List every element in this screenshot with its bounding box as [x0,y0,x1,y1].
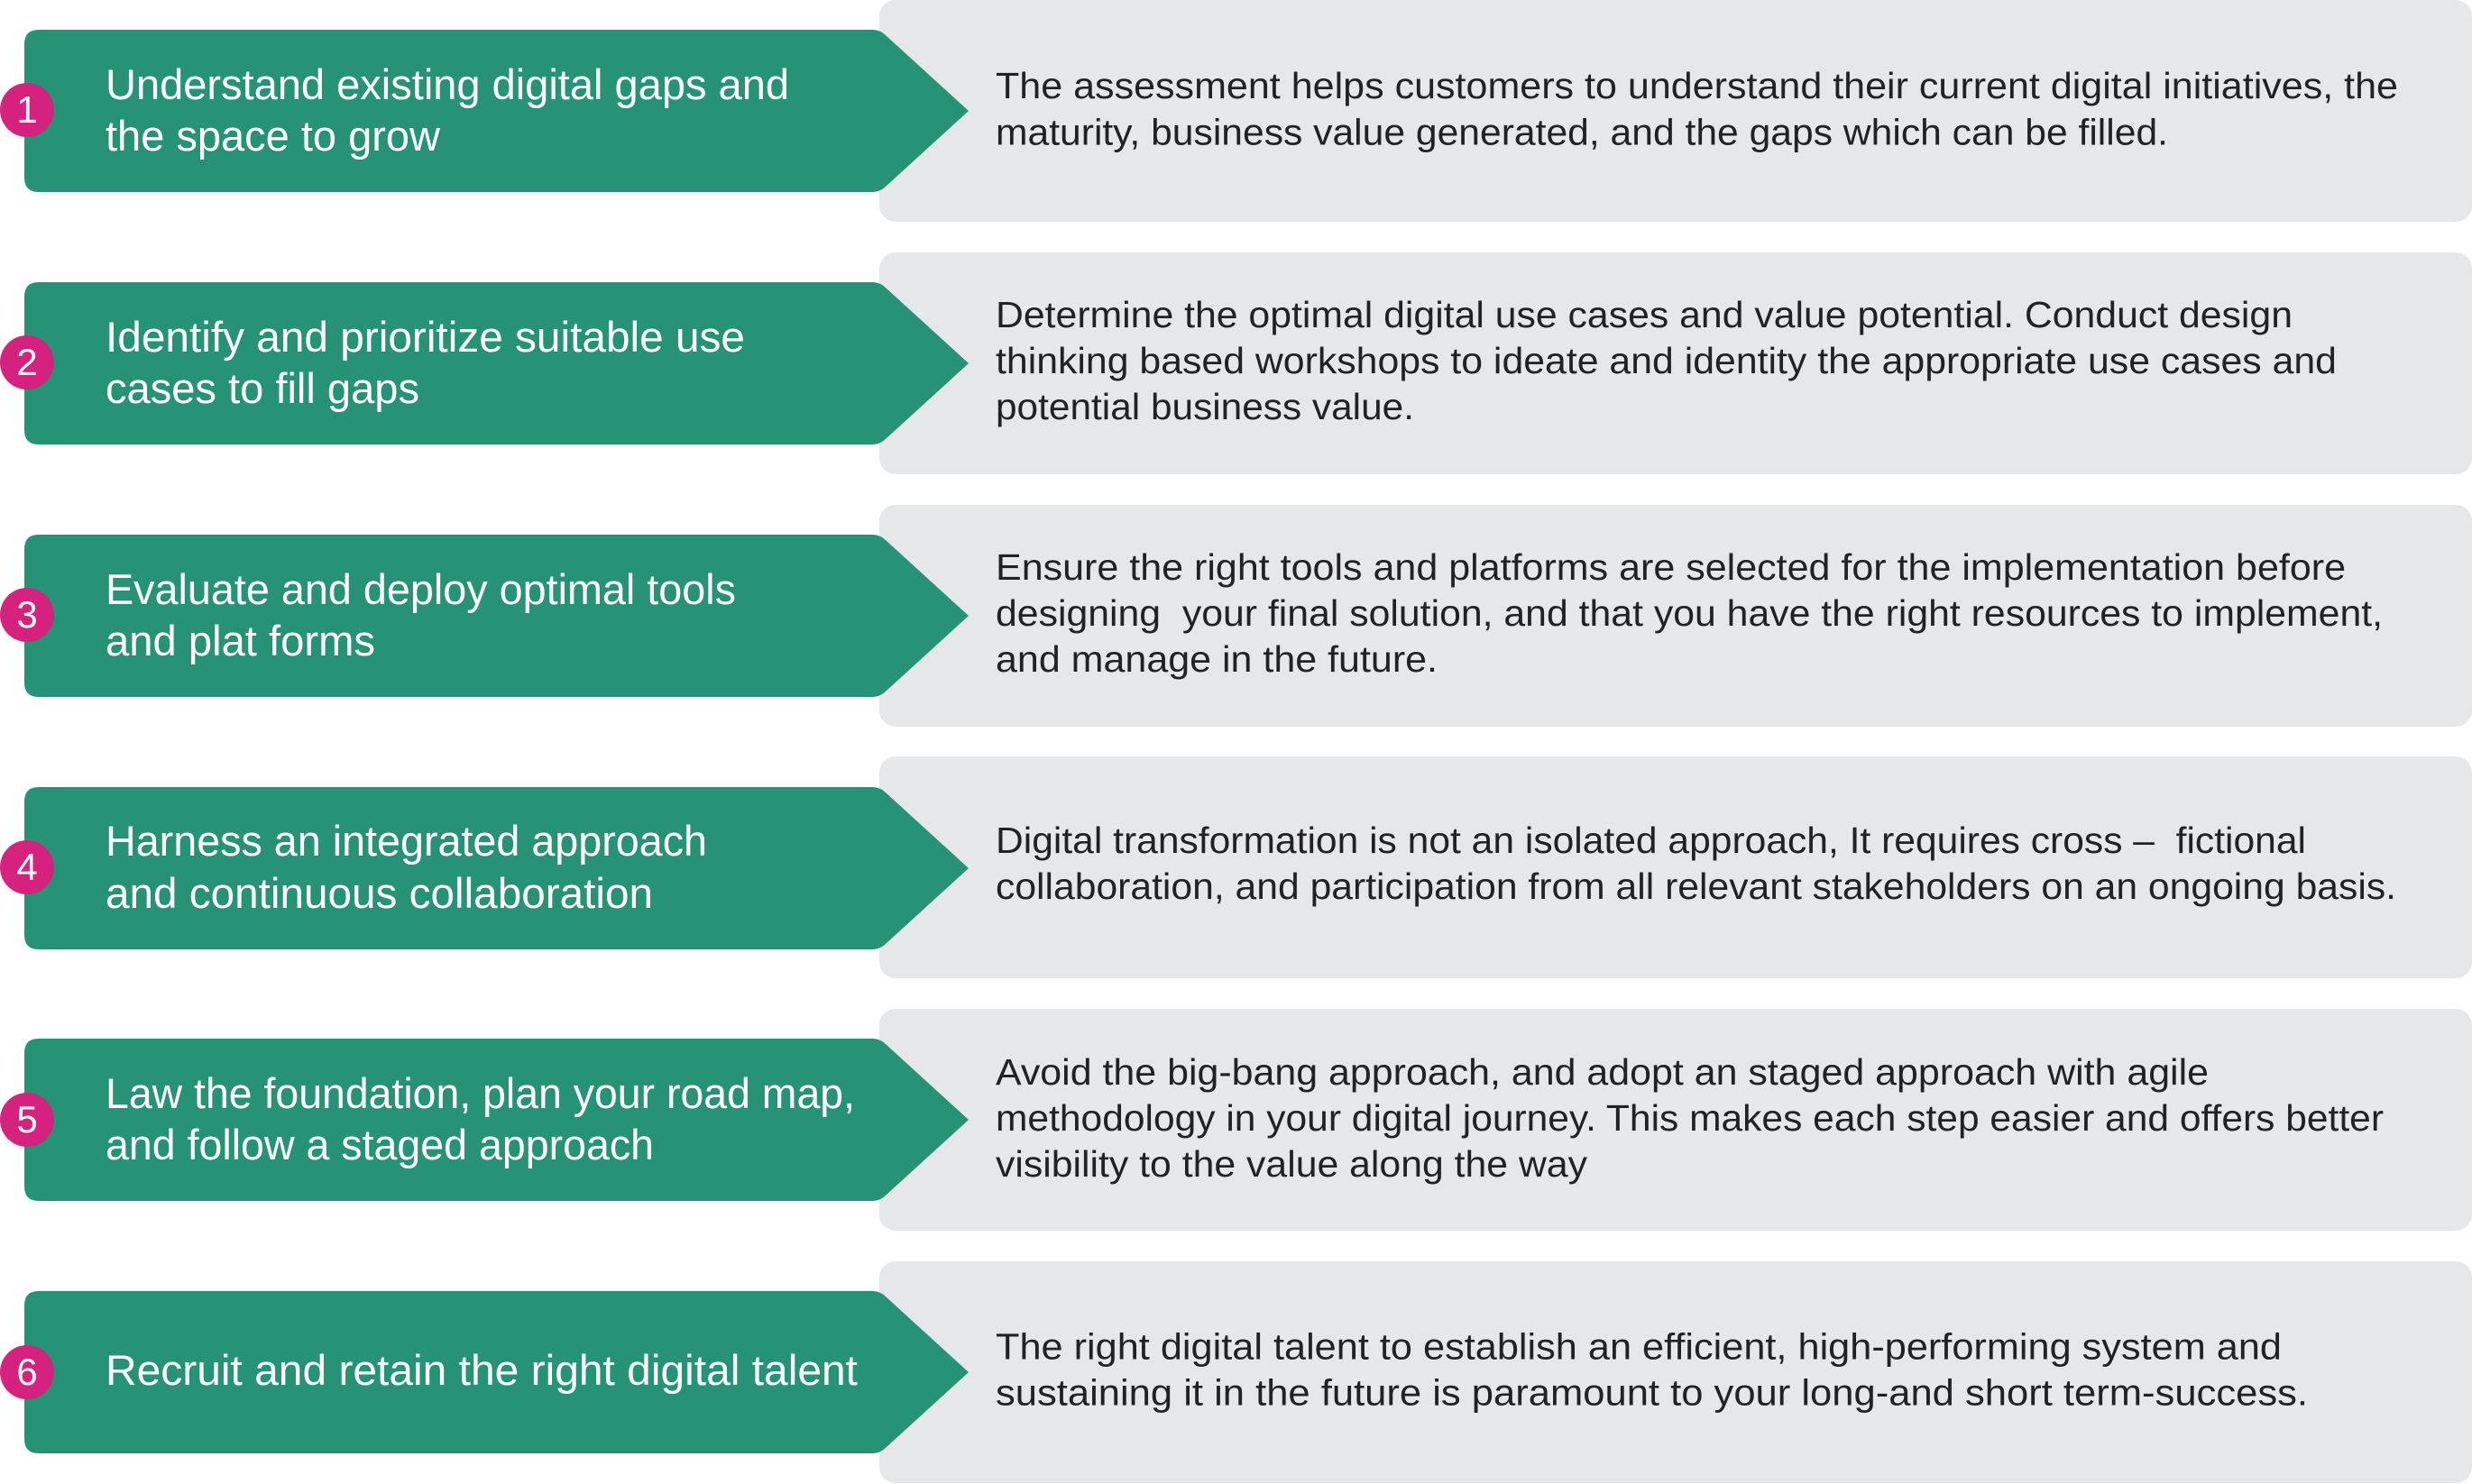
description panel 6 [879,1261,2472,1483]
step heading 3: and plat forms [106,617,375,664]
green arrow 3 [24,535,969,697]
green arrow 5 [24,1039,969,1201]
number badge 2: 2 [16,341,38,383]
description panel 4 [879,756,2472,978]
step description 3: designing your final solution, and that you have the right resources to implement, [996,592,2383,634]
row 6: talent [0,1261,2472,1483]
number badge 3 [0,588,54,642]
step description 5: visibility to the value along the way [996,1143,1588,1185]
number badge 6: 6 [16,1351,38,1393]
step description 3: and manage in the future. [996,638,1438,680]
step description 6: The right digital talent to establish an efficient, high-performing system and [996,1325,2282,1367]
number badge 1 [0,83,54,137]
step heading 1: the space to grow [106,112,441,160]
green arrow 6 [24,1291,969,1453]
step heading 5: and follow a staged approach [106,1121,654,1168]
step description 2: thinking based workshops to ideate and identity the appropriate use cases and [996,340,2337,381]
step heading 6: Recruit and retain the right digital talent [106,1346,858,1394]
step heading 2: cases to fill gaps [106,364,419,412]
step heading 3: Evaluate and deploy optimal tools [106,565,736,613]
step description 5: Avoid the big-bang approach, and adopt an staged approach with agile [996,1051,2209,1093]
step description 1: The assessment helps customers to understand their current digital initiatives, the [996,65,2398,106]
step description 6: sustaining it in the future is paramount to your long-and short term-success. [996,1372,2308,1414]
row 5: road map [0,1009,2472,1231]
number badge 4: 4 [16,846,38,888]
description panel 2 [879,252,2472,474]
step heading 2: Identify and prioritize suitable use [106,313,745,361]
row 1: assessment [0,0,2472,222]
step description 3: Ensure the right tools and platforms are selected for the implementation before [996,546,2346,588]
number badge 2 [0,335,54,389]
green arrow 1 [24,30,969,192]
step heading 1: Understand existing digital gaps and [106,60,789,108]
number badge 4 [0,840,54,894]
step description 4: Digital transformation is not an isolated approach, It requires cross – fictional [996,820,2306,861]
step heading 4: Harness an integrated approach [106,817,707,865]
number badge 5 [0,1093,54,1147]
number badge 1: 1 [16,88,38,131]
row 2: use cases [0,252,2472,474]
step description 5: methodology in your digital journey. This makes each step easier and offers better [996,1097,2384,1139]
step description 4: collaboration, and participation from all relevant stakeholders on an ongoing basis. [996,866,2396,907]
step heading 5: Law the foundation, plan your road map, [106,1069,855,1117]
step heading 4: and continuous collaboration [106,869,653,917]
number badge 3: 3 [16,593,38,636]
description panel 5 [879,1009,2472,1231]
step description 1: maturity, business value generated, and the gaps which can be filled. [996,112,2168,153]
description panel 3 [879,505,2472,727]
number badge 6 [0,1345,54,1399]
step description 2: potential business value. [996,386,1414,427]
step description 2: Determine the optimal digital use cases and value potential. Conduct design [996,294,2293,335]
row 4: collaboration [0,756,2472,978]
description panel 1 [879,0,2472,222]
green arrow 4 [24,787,969,949]
number badge 5: 5 [16,1098,38,1140]
row 3: tools [0,505,2472,727]
green arrow 2 [24,282,969,444]
